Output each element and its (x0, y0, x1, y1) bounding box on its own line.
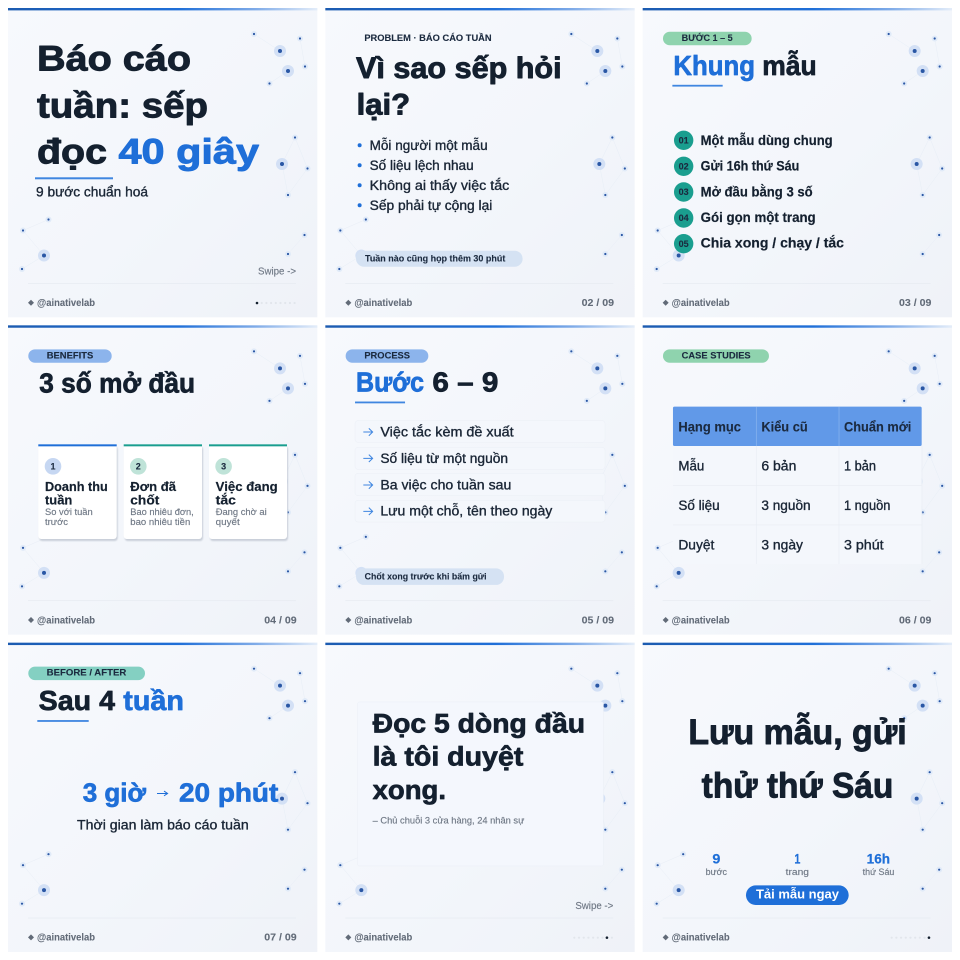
card 1 (38, 444, 118, 541)
panel background (8, 8, 317, 317)
heading (673, 50, 817, 81)
numbered list: 05 (679, 239, 689, 249)
section pill (663, 349, 769, 363)
arrow list: Ba việc cho tuần sau (380, 478, 511, 493)
panel background (643, 643, 952, 952)
CTA button: Tải mẫu ngay (756, 886, 839, 901)
top accent bar (325, 325, 635, 328)
card 1: 1 (50, 462, 56, 472)
constellation decoration (654, 666, 945, 907)
numbered list: 02 (679, 162, 689, 172)
heading: tuần (123, 685, 184, 716)
callout pill (356, 251, 523, 267)
footer: 03 / 09 (899, 297, 932, 309)
panel background (8, 325, 317, 635)
comparison table (673, 407, 922, 564)
quote card (358, 702, 603, 866)
stat: 16h Friday (863, 851, 894, 877)
panel background (325, 325, 635, 635)
constellation decoration (19, 31, 310, 272)
panel background (325, 643, 635, 952)
section pill: BƯỚC 1 – 5 (682, 32, 733, 44)
stat caption: Thời gian làm báo cáo tuần (77, 817, 249, 832)
card 3: tắc (216, 492, 236, 507)
quote card: – Chủ chuỗi 3 cửa hàng, 24 nhân sự (373, 815, 525, 826)
stat: 1 page (786, 851, 809, 877)
constellation decoration (336, 31, 628, 272)
footer: 06 / 09 (899, 614, 932, 626)
numbered list: 03 (679, 187, 689, 197)
footer: 05 / 09 (582, 614, 614, 626)
card 1: Doanh thu (45, 479, 108, 494)
section pill: BEFORE / AFTER (47, 668, 126, 679)
footer (663, 600, 932, 626)
card 2: Đơn đã (130, 479, 177, 494)
card 2: chốt (130, 492, 160, 507)
panel 8: testimonial (325, 643, 635, 952)
arrow list (355, 421, 605, 522)
key stat (83, 778, 279, 808)
constellation decoration (654, 31, 945, 272)
panel background (8, 643, 317, 952)
comparison table: Mẫu (678, 459, 704, 474)
top accent bar (8, 8, 317, 10)
heading: Sau 4 (39, 685, 115, 716)
section pill (28, 349, 112, 363)
CTA heading (688, 712, 907, 805)
panel 6: case studies table (643, 325, 952, 635)
heading underline (355, 402, 405, 403)
key stat: 20 phút (179, 778, 279, 808)
footer (663, 918, 931, 944)
footer: 07 / 09 (264, 932, 297, 944)
comparison table: Số liệu (678, 498, 720, 513)
heading: Khung (673, 50, 755, 81)
footer (663, 283, 932, 309)
stat: 16h Friday: 16h (867, 851, 890, 866)
subtitle: 9 bước chuẩn hoá (36, 184, 148, 200)
heading underline (37, 720, 89, 722)
card 2 (124, 444, 203, 541)
constellation decoration (336, 348, 628, 589)
card 2: bao nhiêu tiền (130, 517, 190, 528)
footer: 04 / 09 (264, 614, 297, 626)
top accent bar (325, 643, 635, 645)
cover title: Báo cáo (37, 40, 191, 78)
panel background (643, 8, 952, 317)
section pill (346, 349, 428, 363)
top accent bar (643, 325, 952, 328)
heading underline (672, 85, 723, 87)
cover title: tuần: sếp (37, 86, 208, 125)
panel background (325, 8, 635, 317)
CTA button (746, 885, 849, 905)
top accent bar (643, 8, 952, 10)
CTA heading: thử thứ Sáu (702, 766, 893, 805)
bullet list: Không ai thấy việc tắc (370, 178, 510, 193)
top accent bar (643, 643, 952, 645)
card 2: Bao nhiêu đơn, (130, 507, 194, 518)
panel 3: framework steps 1-5 (643, 8, 952, 317)
heading: Bước (356, 367, 424, 398)
quote card: xong. (373, 775, 446, 805)
top accent bar (8, 643, 317, 645)
panel 9: call to action (643, 643, 952, 952)
comparison table: Kiểu cũ (761, 420, 808, 435)
callout pill: Tuần nào cũng họp thêm 30 phút (365, 254, 506, 265)
numbered list: Gói gọn một trang (701, 210, 816, 225)
numbered list: Chia xong / chạy / tắc (701, 236, 844, 251)
card 3 (209, 444, 288, 541)
numbered list (674, 131, 844, 253)
footer: @ainativelab (672, 615, 730, 626)
stat: 16h Friday: thứ Sáu (863, 867, 894, 877)
comparison table: 3 phút (844, 537, 884, 552)
footer (345, 283, 614, 309)
card 3: Việc đang (216, 479, 278, 494)
section label: PROBLEM · BÁO CÁO TUẦN (364, 33, 492, 44)
arrow list: Việc tắc kèm đề xuất (380, 425, 514, 440)
callout pill (356, 568, 504, 585)
heading (39, 685, 184, 716)
quote card: Đọc 5 dòng đầu (373, 709, 585, 739)
section pill (28, 667, 145, 680)
callout pill: Chốt xong trước khi bấm gửi (365, 571, 487, 582)
arrow list: Lưu một chỗ, tên theo ngày (380, 504, 553, 519)
footer (345, 918, 613, 944)
cover title: đọc (37, 132, 107, 171)
footer: @ainativelab (37, 615, 95, 626)
arrow list: Số liệu từ một nguồn (380, 451, 508, 466)
numbered list: Mở đầu bằng 3 số (701, 184, 813, 199)
card 2: 2 (136, 462, 141, 472)
heading: mẫu (762, 50, 817, 81)
panel 4: benefits (8, 325, 317, 635)
stat: 9 steps (706, 851, 727, 877)
numbered list: Gửi 16h thứ Sáu (701, 159, 799, 174)
stat: 1 page: 1 (794, 851, 801, 866)
panel background (643, 325, 952, 635)
numbered list: 04 (679, 213, 689, 223)
comparison table: Duyệt (678, 537, 715, 552)
bullet list: Số liệu lệch nhau (370, 158, 474, 173)
stat: 9 steps: bước (706, 867, 727, 877)
comparison table: Chuẩn mới (844, 420, 911, 435)
footer: @ainativelab (354, 298, 412, 309)
comparison table: 3 nguồn (761, 498, 811, 513)
panel 7: before / after (8, 643, 317, 952)
cover title (37, 40, 260, 171)
constellation decoration (19, 348, 310, 589)
section pill: CASE STUDIES (682, 350, 751, 361)
comparison table: 1 bản (844, 459, 876, 474)
heading: 3 số mở đầu (39, 368, 195, 399)
footer: @ainativelab (354, 615, 412, 626)
top accent bar (8, 325, 317, 328)
swipe hint: Swipe -> (258, 266, 296, 277)
bullet list: Sếp phải tự cộng lại (370, 198, 492, 213)
numbered list: 01 (679, 136, 689, 146)
top accent bar (325, 8, 635, 10)
numbered list: Một mẫu dùng chung (701, 133, 833, 148)
card 3: Đang chờ ai (216, 507, 267, 518)
footer: @ainativelab (672, 933, 730, 944)
panel 2: problem (325, 8, 635, 317)
footer: 02 / 09 (582, 297, 614, 309)
comparison table: 1 nguồn (844, 498, 890, 513)
card 1: So với tuần (45, 507, 93, 518)
panel 5: process steps 6-9 (325, 325, 635, 635)
key stat: 3 giờ (83, 778, 147, 808)
quote card: là tôi duyệt (373, 742, 523, 772)
comparison table: 6 bản (761, 459, 796, 474)
bullet list: Mỗi người một mẫu (370, 138, 488, 153)
heading: Vì sao sếp hỏi (356, 52, 562, 85)
footer: @ainativelab (37, 933, 95, 944)
footer: @ainativelab (354, 933, 412, 944)
comparison table: 3 ngày (761, 537, 803, 552)
section pill: PROCESS (364, 350, 410, 361)
swipe hint: Swipe -> (575, 901, 613, 912)
heading (356, 367, 498, 398)
footer: @ainativelab (37, 298, 95, 309)
CTA heading: Lưu mẫu, gửi (688, 712, 907, 752)
title underline (35, 177, 113, 179)
cover title: 40 giây (118, 132, 260, 171)
footer (28, 600, 297, 626)
panel 1: cover (8, 8, 317, 317)
constellation decoration (336, 666, 628, 907)
card 1: trước (45, 517, 68, 528)
footer: @ainativelab (672, 298, 730, 309)
stat: 1 page: trang (786, 867, 809, 877)
comparison table: Hạng mục (678, 420, 741, 435)
footer (28, 918, 297, 944)
heading (356, 52, 562, 121)
card 1: tuần (45, 492, 72, 507)
section pill: BENEFITS (47, 350, 93, 361)
stat: 9 steps: 9 (712, 851, 720, 866)
section pill (663, 32, 752, 45)
constellation decoration (19, 666, 310, 907)
constellation decoration (654, 348, 945, 589)
card 3: quyết (216, 517, 240, 528)
footer (28, 283, 296, 309)
card 3: 3 (221, 462, 226, 472)
heading: 6 – 9 (432, 367, 498, 398)
bullet list (358, 138, 510, 213)
footer (345, 600, 614, 626)
heading: lại? (357, 88, 410, 121)
